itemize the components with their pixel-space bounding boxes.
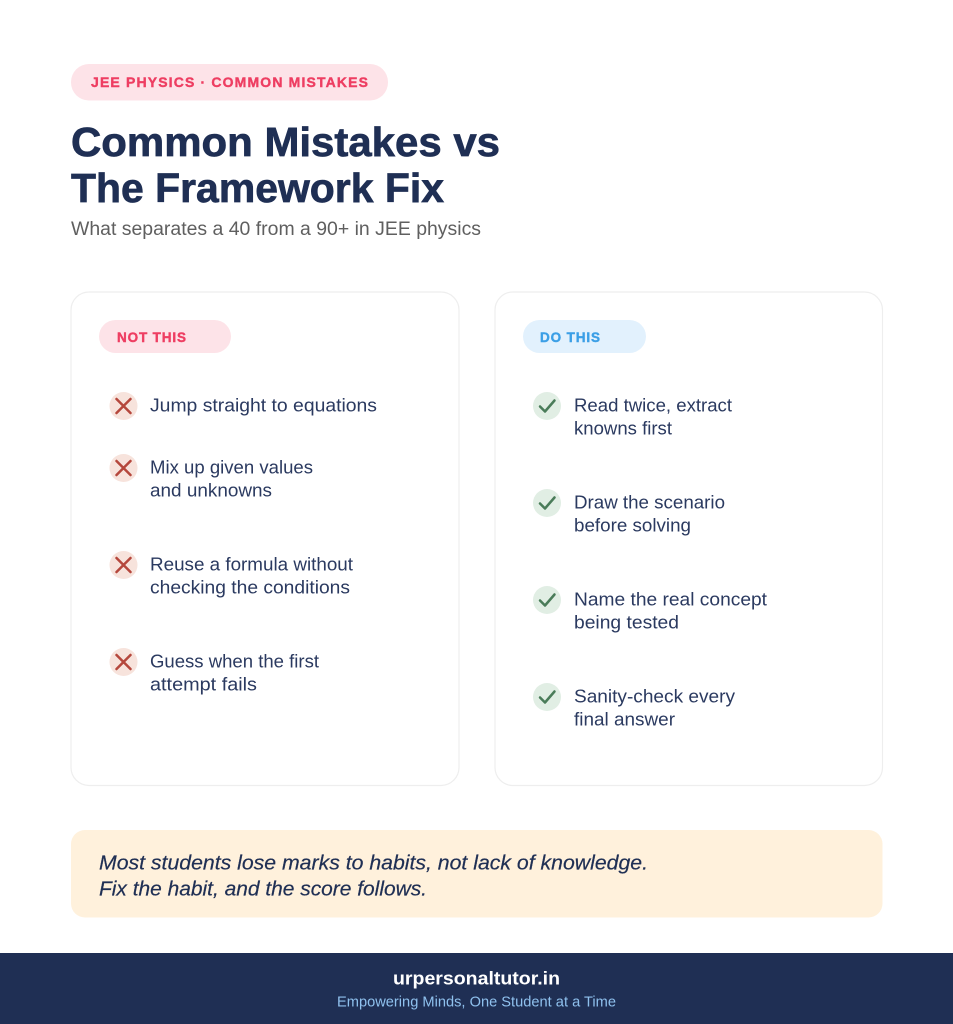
fix 2 — [533, 489, 725, 536]
fix 3: being tested — [574, 612, 679, 632]
fix 4 — [533, 683, 736, 730]
mistake 4: Guess when the first — [150, 650, 319, 672]
fix 3: Name the real concept — [574, 588, 767, 610]
mistake 3 — [110, 551, 353, 598]
fix 2: Draw the scenario — [574, 492, 725, 512]
eyebrow tag: JEE PHYSICS · COMMON MISTAKES — [91, 74, 368, 90]
eyebrow tag — [71, 64, 388, 100]
mistake 4 — [110, 648, 319, 694]
do this tag: DO THIS — [540, 330, 600, 345]
footer — [0, 953, 953, 1024]
mistake 2: and unknowns — [150, 480, 272, 500]
subtitle: What separates a 40 from a 90+ in JEE physics — [71, 219, 481, 240]
fix 4: Sanity-check every — [574, 686, 736, 706]
mistake 2 — [110, 454, 313, 500]
callout: Fix the habit, and the score follows. — [99, 878, 427, 900]
mistake 1 — [110, 392, 377, 420]
mistake 3: checking the conditions — [150, 576, 350, 598]
fix 2: before solving — [574, 514, 691, 536]
not this tag — [99, 320, 231, 353]
not this tag: NOT THIS — [117, 330, 186, 345]
title: Common Mistakes vs — [71, 119, 500, 165]
fix 3 — [533, 586, 767, 632]
fix 4: final answer — [574, 708, 675, 730]
title — [71, 119, 500, 211]
panel: do this — [495, 292, 882, 786]
mistake 4: attempt fails — [150, 674, 257, 694]
mistake 1: Jump straight to equations — [150, 394, 377, 416]
callout: Most students lose marks to habits, not lack of knowledge. — [99, 852, 648, 874]
fix 1 — [533, 392, 732, 438]
footer brand: urpersonaltutor.in — [393, 968, 560, 988]
fix 1: knowns first — [574, 418, 672, 438]
title: The Framework Fix — [71, 165, 444, 211]
callout — [71, 830, 882, 918]
do this tag — [523, 320, 646, 353]
mistake 3: Reuse a formula without — [150, 554, 353, 574]
footer tagline: Empowering Minds, One Student at a Time — [337, 994, 616, 1010]
panel: not this — [71, 292, 459, 786]
fix 1: Read twice, extract — [574, 394, 732, 416]
mistake 2: Mix up given values — [150, 456, 313, 478]
